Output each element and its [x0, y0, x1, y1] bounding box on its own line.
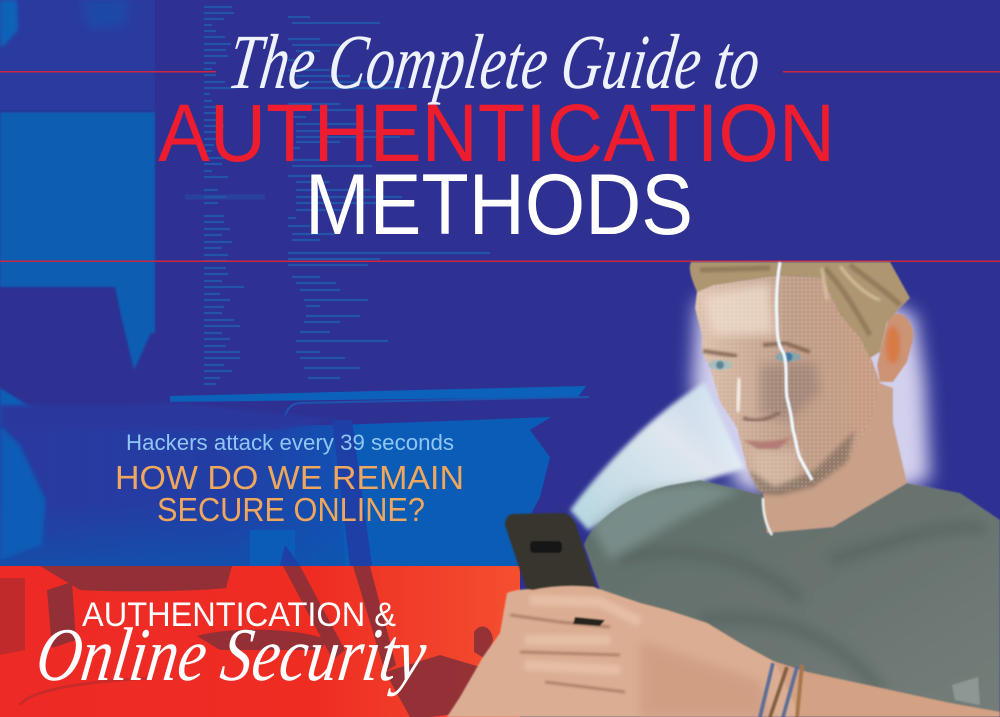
- stubble: [748, 430, 855, 495]
- subhead block: [115, 430, 464, 528]
- hands: [447, 586, 800, 717]
- title block: [158, 18, 835, 253]
- facial dot mesh: [697, 276, 879, 492]
- finger highlights: [525, 600, 640, 670]
- chin highlight: [750, 450, 800, 485]
- bracelets: [760, 663, 802, 717]
- hair highlights: [700, 265, 900, 335]
- title: METHODS: METHODS: [305, 157, 693, 253]
- watch strap hint: [952, 677, 980, 705]
- desk items in maroon: [40, 566, 493, 717]
- red rule lines: [0, 71, 1000, 262]
- shirt fold shading: [620, 527, 985, 690]
- neck: [763, 382, 907, 533]
- section heading: [32, 596, 432, 697]
- title: AUTHENTICATION: AUTHENTICATION: [158, 88, 835, 179]
- phone camera: [530, 541, 562, 553]
- ear: [877, 313, 913, 382]
- desk cable: [20, 678, 150, 705]
- heading: online security: Online Security: [32, 612, 432, 697]
- back of hand shading: [640, 640, 770, 717]
- t-shirt: [584, 480, 1000, 717]
- mug: [0, 578, 25, 655]
- phone: [505, 513, 600, 600]
- finger shadows: [510, 615, 625, 692]
- glow around head: [692, 300, 930, 500]
- title: The Complete Guide to: The Complete Guide to: [224, 18, 766, 105]
- scanning light line: [776, 262, 812, 480]
- hair: [690, 262, 910, 358]
- forehead highlight: [703, 282, 775, 335]
- nose and mouth: [737, 378, 792, 449]
- background: code editor screenshot: [185, 7, 490, 384]
- question line 2: SECURE ONLINE?: [157, 491, 425, 528]
- background photo: blue desk and monitor: [0, 0, 589, 566]
- undershirt edge: [763, 498, 772, 535]
- inner ear: [886, 326, 900, 364]
- face scan light beam: [570, 382, 745, 530]
- bottom red band with desk photo: [0, 566, 520, 717]
- question line 1: HOW DO WE REMAIN: [115, 459, 464, 496]
- eyes and brows: [703, 343, 810, 370]
- photo: man scanning his face with a phone: [447, 262, 1000, 717]
- phone in fingers: [573, 617, 605, 626]
- stat: hackers attack: Hackers attack every 39 seconds: [126, 430, 454, 455]
- light shoulder wash: [590, 482, 740, 560]
- arm: [770, 660, 1000, 717]
- under-eye and nose shadow: [760, 362, 820, 420]
- face: [695, 275, 880, 493]
- heading: authentication and: AUTHENTICATION &: [82, 596, 396, 634]
